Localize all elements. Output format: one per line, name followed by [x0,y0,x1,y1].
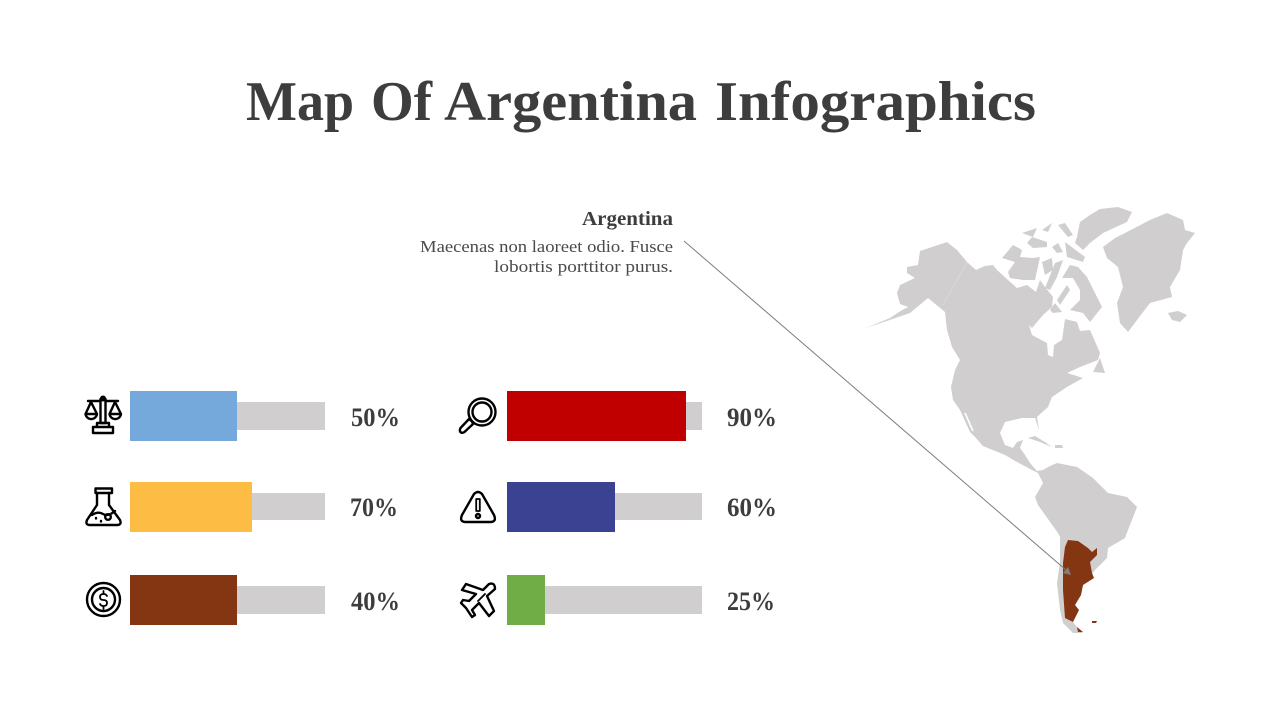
bar track [686,402,702,430]
icon: scales [86,397,121,433]
bar fill [507,482,615,532]
bar fill [130,482,252,532]
bar row: 40% [87,575,400,625]
arrow to Argentina [684,241,1071,575]
bar fill [507,391,686,441]
value: 25% [727,587,775,616]
bar fill [130,575,237,625]
callout heading: Argentina [582,208,673,230]
bar track [252,493,325,520]
Baja California gulf [965,413,973,431]
bar row: 70% [86,482,398,532]
bar track [615,493,702,520]
Greenland [1103,213,1195,332]
title: Of [371,71,433,133]
value: 40% [351,587,400,616]
bar row: 90% [460,391,777,441]
icon: magnifying glass [460,398,496,433]
Argentina highlighted [1063,540,1097,632]
bar fill [507,575,545,625]
callout: Argentina [420,208,1071,575]
bar track [237,586,325,614]
icon: airplane [461,584,495,617]
Iceland [1168,311,1187,322]
bar row: 60% [461,482,777,532]
bar row: 50% [86,391,400,441]
title: Argentina [444,71,697,133]
value: 50% [351,403,400,432]
value: 90% [727,403,777,432]
callout body: Maecenas non laoreet odio. Fusce [420,237,673,256]
icon: flask [86,488,121,525]
icon: warning triangle [461,492,495,522]
Arctic islands [1002,207,1132,448]
map of the Americas [866,207,1195,633]
bar track [545,586,702,614]
bar fill [130,391,237,441]
bar row: 25% [461,575,775,625]
icon: coin [87,583,120,616]
bar track [237,402,325,430]
value: 60% [727,493,777,522]
callout body: lobortis porttitor purus. [494,257,673,276]
title: Infographics [715,71,1036,133]
title: Map [246,71,354,133]
value: 70% [350,493,398,522]
North and South America landmass [866,242,1137,633]
Alaska border [943,262,967,305]
